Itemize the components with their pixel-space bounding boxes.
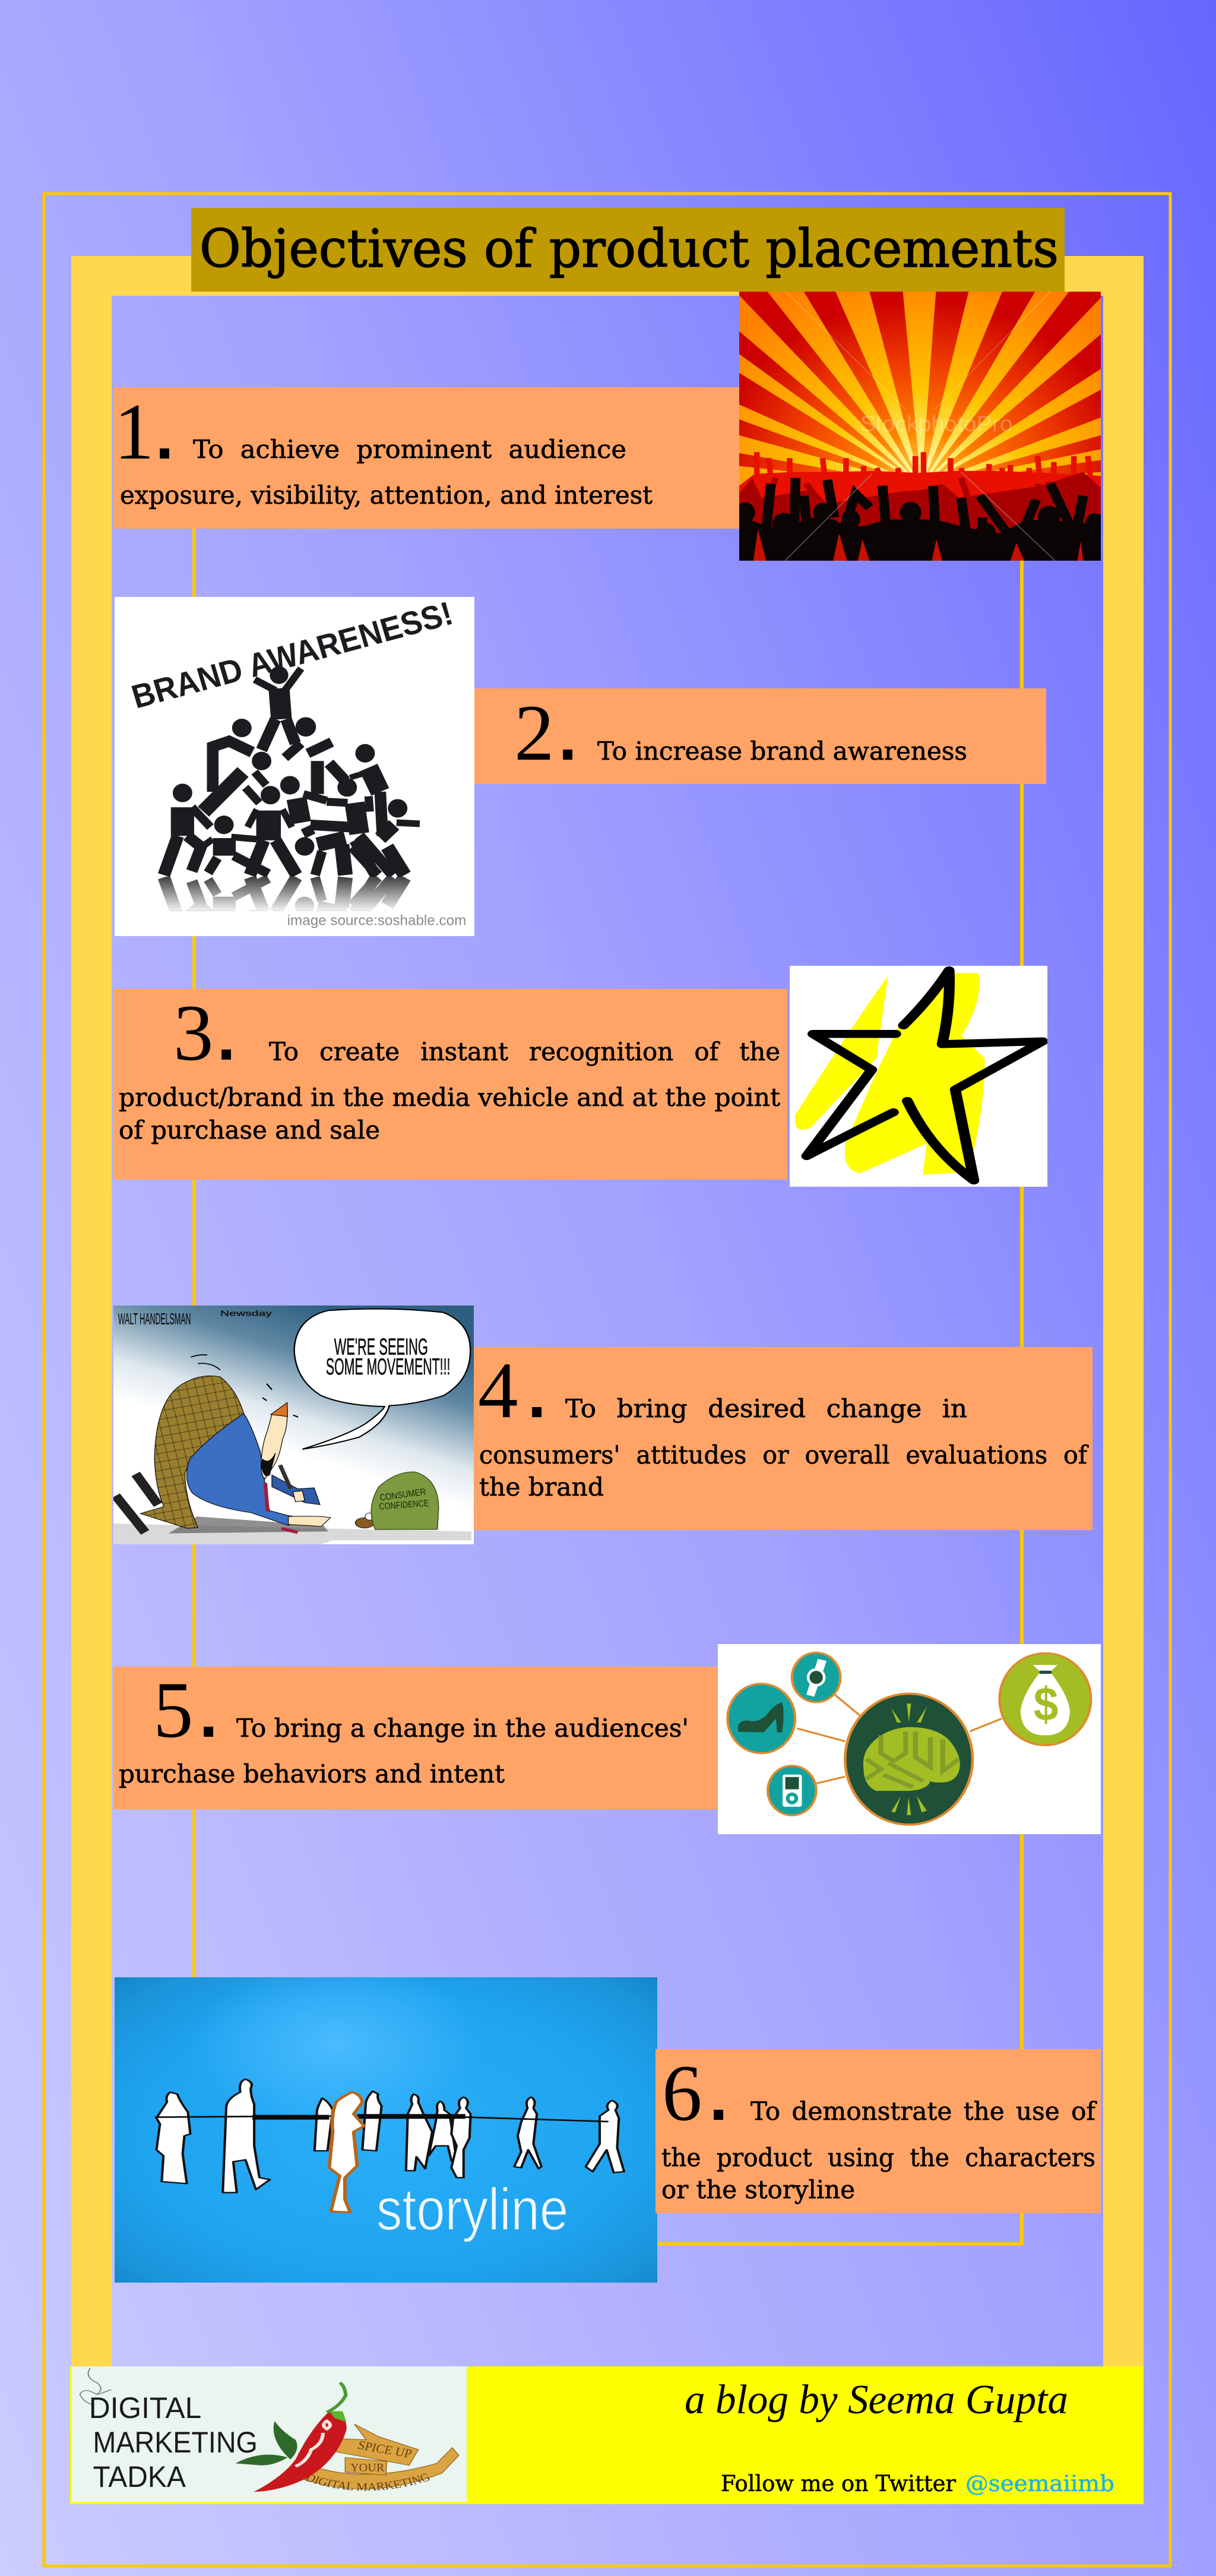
image source credit: image source:soshable.com (287, 912, 466, 928)
floor reflection (158, 877, 411, 911)
objective 1 text: exposure, visibility, attention, and interest (120, 481, 653, 510)
number 1: . (154, 409, 175, 472)
panel 1: audience exposure (113, 387, 739, 529)
money bag icon: $ (1034, 1678, 1058, 1731)
objective 3 text: To create instant recognition of the (269, 1037, 780, 1066)
walking figures (157, 2079, 624, 2192)
objective 3 text: product/brand in the media vehicle and at the point (119, 1083, 780, 1112)
logo wordmark (89, 2392, 258, 2493)
logo: digital marketing tadka (71, 2366, 467, 2502)
number 4: 4 (478, 1347, 518, 1435)
byline: a blog by Seema Gupta (685, 2377, 1068, 2423)
signature: Newsday (220, 1310, 273, 1318)
consumer confidence turtle: CONSUMER (379, 1487, 427, 1503)
image 4: consumer confidence cartoon (113, 1306, 474, 1544)
watermark: StockphotoPro (860, 412, 1013, 436)
objective 5 text (119, 1714, 689, 1788)
speech bubble (294, 1309, 470, 1449)
objective 4 text: consumers' attitudes or overall evaluations of (479, 1440, 1089, 1469)
twitter line: Follow me on Twitter (721, 2471, 956, 2496)
image 1: crowd under sunburst (739, 292, 1101, 561)
brain circle (845, 1694, 973, 1825)
ribbon (304, 2423, 460, 2491)
logo wordmark: DIGITAL (89, 2392, 201, 2425)
smoke (80, 2368, 111, 2404)
shoe icon (727, 1684, 795, 1753)
ribbon: SPICE UP (356, 2438, 414, 2461)
twitter line (721, 2471, 1114, 2496)
consumer confidence turtle: CONFIDENCE (379, 1498, 429, 1512)
number 5: . (198, 1687, 218, 1750)
objective 6 text (661, 2097, 1097, 2204)
figures pyramid (164, 666, 420, 875)
connectors (797, 1695, 1002, 1783)
watermark (786, 292, 1050, 436)
story rope (155, 2116, 609, 2122)
panel 5: purchase behavior (113, 1666, 718, 1809)
objective 3 text: of purchase and sale (119, 1115, 380, 1145)
number 6: . (708, 2071, 729, 2133)
soft highlight (183, 1977, 490, 2132)
objective 4 text: the brand (479, 1472, 604, 1502)
number 3: 3 (173, 989, 214, 1077)
number 4: . (527, 1368, 547, 1430)
logo wordmark: MARKETING (93, 2426, 258, 2459)
number 5: 5 (153, 1666, 194, 1755)
objective 4 text (479, 1394, 1089, 1502)
consumer confidence turtle (355, 1472, 439, 1529)
twitter line: @seemaiimb (965, 2471, 1114, 2496)
number 3: . (216, 1010, 236, 1073)
objective 2 text: To increase brand awareness (597, 737, 967, 766)
objective 1 text (120, 435, 653, 510)
panel 2: brand awareness (474, 688, 1046, 784)
panel 4: attitude change (474, 1347, 1092, 1530)
red gaps in crowd (753, 529, 1083, 561)
image 3: hand-drawn star (790, 966, 1047, 1187)
image 6: storyline silhouettes (115, 1977, 657, 2283)
crawling man (116, 1355, 331, 1534)
panel 3: instant recognition (113, 989, 787, 1180)
number 2: 2 (514, 689, 555, 777)
thick yellow frame (71, 256, 1144, 2376)
number 6: 6 (662, 2049, 702, 2138)
ribbon: YOUR (350, 2461, 385, 2474)
highlighted orange figure (329, 2092, 364, 2212)
black star outline (807, 971, 1043, 1180)
objective 1 text: To achieve prominent audience (193, 435, 626, 464)
black crowd layer (735, 478, 1105, 561)
watermark lines over crowd (785, 472, 1055, 561)
dark red crowd layer (739, 472, 1101, 561)
objective 3 text (119, 1037, 780, 1145)
objective 6 text: or the storyline (661, 2175, 855, 2204)
signature: WALT HANDELSMAN (118, 1311, 191, 1328)
objective 6 text: the product using the characters (661, 2143, 1095, 2172)
red crowd layer (739, 452, 1101, 561)
number 1: 1 (114, 388, 154, 476)
objective 5 text: purchase behaviors and intent (119, 1759, 505, 1788)
ribbon: DIGITAL MARKETING (305, 2473, 430, 2491)
objective 5 text: To bring a change in the audiences' (236, 1714, 689, 1743)
chili pepper (235, 2383, 347, 2492)
watch icon (792, 1652, 840, 1702)
number 2: . (558, 710, 578, 773)
inner thin gold connecting line (194, 416, 1022, 2244)
image 2: brand awareness human pyramid (115, 595, 474, 936)
objective 4 text: To bring desired change in (565, 1394, 967, 1423)
music player icon (768, 1766, 816, 1815)
logo wordmark: TADKA (93, 2461, 186, 2493)
objective 6 text: To demonstrate the use of (750, 2097, 1097, 2126)
yellow scribble (795, 973, 985, 1175)
title: Objectives of product placements (200, 218, 1059, 279)
sunburst rays (736, 292, 1107, 486)
floor (113, 1524, 471, 1544)
image 5: brain and products diagram (718, 1644, 1101, 1834)
panel 6: demonstrate use (656, 2049, 1101, 2213)
footer band (70, 2366, 1144, 2504)
money bag icon (999, 1653, 1091, 1745)
